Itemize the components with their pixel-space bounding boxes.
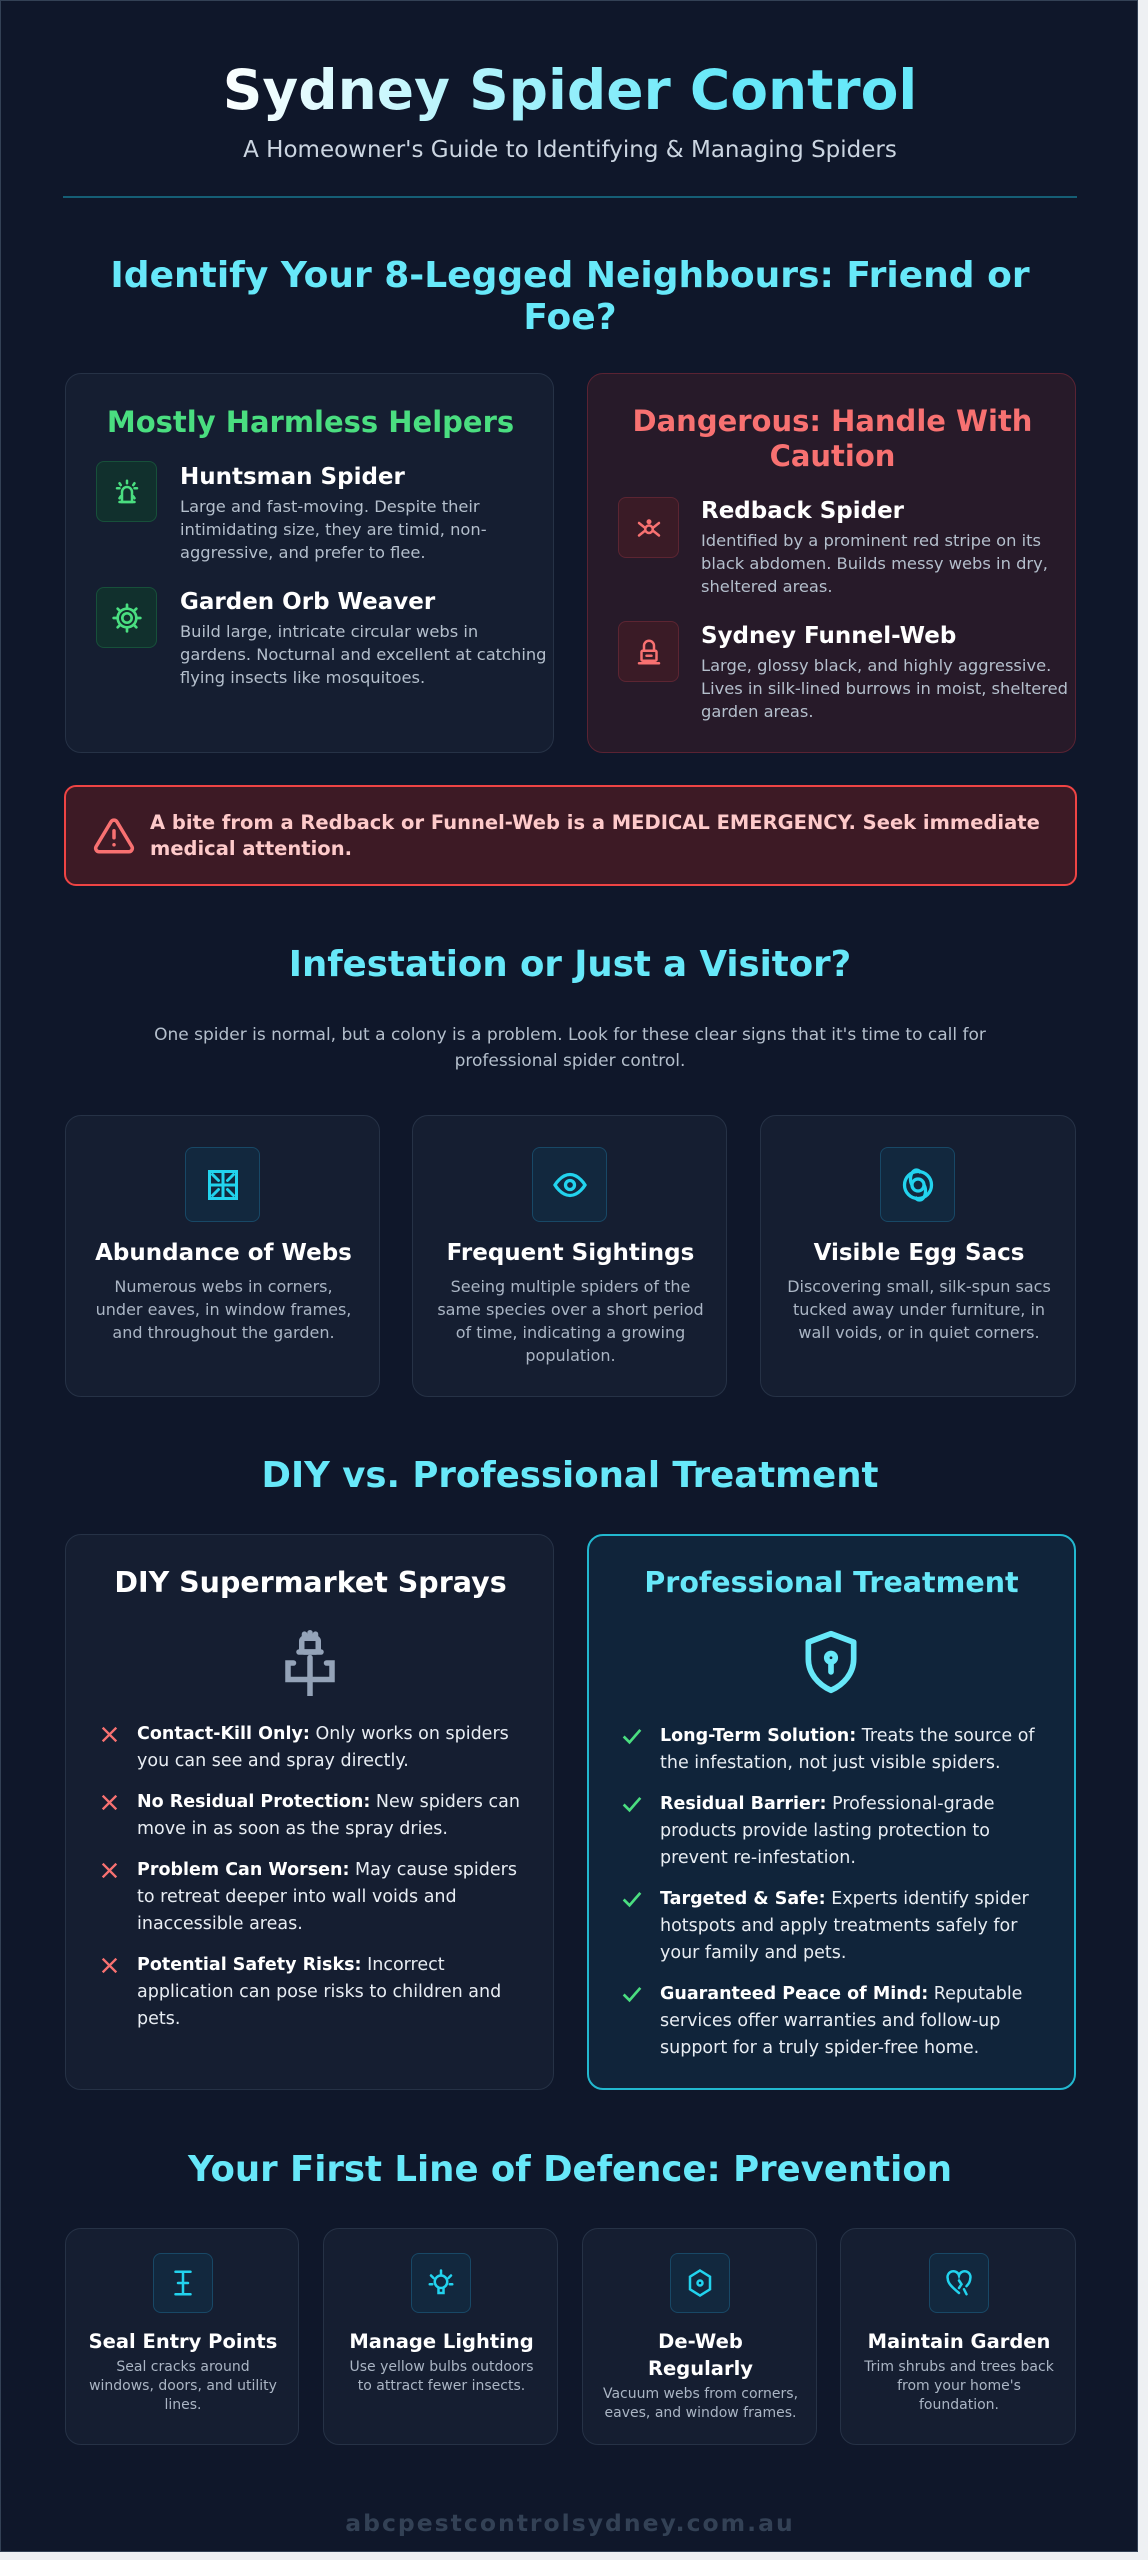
card: webs: Abundance of Webs [95,1240,352,1266]
icon: egg sac [880,1147,955,1222]
card: garden: Maintain Garden [868,2330,1050,2353]
heading: identify: Identify Your 8-Legged Neighbours: Friend or Foe? [110,255,1030,338]
card: webs: Numerous webs in corners, under eaves, in window frames, and throughout the garden. [96,1277,351,1342]
panel: dangerous [587,373,1076,753]
title [63,57,1077,123]
list: diy cons: Problem Can Worsen: May cause spiders to retreat deeper into wall voids and inaccessible areas. [137,1860,517,1934]
footer: abcpestcontrolsydney.com.au [345,2509,795,2537]
card: sightings: Seeing multiple spiders of the same species over a short period of time, indicating a growing population. [437,1277,704,1365]
card: egg sacs: Discovering small, silk-spun sacs tucked away under furniture, in wall voids, or in quiet corners. [787,1277,1051,1342]
callout text: A bite from a Redback or Funnel-Web is a MEDICAL EMERGENCY. Seek immediate medical attention. [150,811,1040,860]
item: huntsman: Large and fast-moving. Despite their intimidating size, they are timid, non-aggressive, and prefer to flee. [180,497,487,562]
panel: professional [587,1534,1076,2090]
list: pro benefits: Targeted & Safe: Experts identify spider hotspots and apply treatments safely for your family and pets. [660,1889,1029,1963]
icon: web grid [185,1147,260,1222]
card: egg sacs [760,1115,1076,1397]
card: garden: Trim shrubs and trees back from your home's foundation. [864,2359,1054,2413]
heading: diy vs pro: DIY vs. Professional Treatment [261,1455,878,1496]
item: orb weaver: Garden Orb Weaver [180,589,435,615]
item: redback [701,498,1048,596]
card: garden [840,2228,1076,2445]
heading: prevention: Your First Line of Defence: Prevention [188,2149,952,2190]
heading: infestation: Infestation or Just a Visitor? [289,944,851,985]
card: sightings: Frequent Sightings [447,1240,694,1266]
panel title: harmless: Mostly Harmless Helpers [107,405,514,439]
card: de-web: De-Web Regularly [648,2330,753,2380]
icon: hexagon [670,2253,730,2313]
icon: spray [285,1630,335,1696]
icon: heart leaf [929,2253,989,2313]
item: orb weaver: Build large, intricate circular webs in gardens. Nocturnal and excellent at catching flying insects like mosquitoes. [180,622,547,687]
card: sightings [412,1115,727,1397]
item: redback: Identified by a prominent red stripe on its black abdomen. Builds messy webs in dry, sheltered areas. [701,531,1048,596]
item: huntsman [180,464,487,562]
subtitle: A Homeowner's Guide to Identifying & Managing Spiders [243,137,897,163]
card: seal: Seal Entry Points [89,2330,277,2353]
icon: redback [618,497,679,558]
card: webs [65,1115,380,1397]
item: redback: Redback Spider [701,498,904,524]
card: de-web [582,2228,817,2445]
callout: medical emergency [64,785,1077,886]
card: seal [65,2228,299,2445]
card: lighting [323,2228,558,2445]
list: diy cons: Contact-Kill Only: Only works on spiders you can see and spray directly. [137,1724,509,1771]
panel title: dangerous: Dangerous: Handle With Caution [633,404,1032,473]
list: pro benefits: Long-Term Solution: Treats the source of the infestation, not just visible spiders. [660,1726,1035,1773]
icon: bulb [411,2253,471,2313]
icon: huntsman [96,461,157,522]
intro text: One spider is normal, but a colony is a problem. Look for these clear signs that it's time to call for professional spider control. [154,1025,986,1071]
list: pro benefits: Guaranteed Peace of Mind: Reputable services offer warranties and follow-up support for a truly spider-free home. [660,1984,1022,2058]
item: funnel-web: Sydney Funnel-Web [701,623,956,649]
list: diy cons: Potential Safety Risks: Incorrect application can pose risks to children and pets. [137,1955,501,2029]
card: de-web: Vacuum webs from corners, eaves, and window frames. [603,2386,798,2421]
item: funnel-web [701,623,1068,721]
list: pro benefits [622,1726,1035,2058]
list: diy cons: No Residual Protection: New spiders can move in as soon as the spray dries. [137,1792,520,1839]
panel: harmless [65,373,554,753]
list: diy cons [102,1724,520,2029]
card: lighting: Manage Lighting [349,2330,534,2353]
icon: funnel-web [618,621,679,682]
card: seal: Seal cracks around windows, doors, and utility lines. [89,2359,277,2413]
panel title: diy: DIY Supermarket Sprays [114,1566,507,1599]
card: lighting: Use yellow bulbs outdoors to attract fewer insects. [349,2359,534,2394]
list: pro benefits: Residual Barrier: Professional-grade products provide lasting protection to prevent re-infestation. [660,1794,995,1868]
item: huntsman: Huntsman Spider [180,464,405,490]
title: Sydney Spider Control [223,58,917,122]
icon: shield [806,1630,856,1694]
panel title: professional: Professional Treatment [644,1566,1019,1599]
card: egg sacs: Visible Egg Sacs [814,1240,1024,1266]
item: orb weaver [180,589,547,687]
icon: seal [153,2253,213,2313]
icon: eye [532,1147,607,1222]
panel: diy [65,1534,554,2090]
icon: orb weaver [96,587,157,648]
icon: warning [94,818,134,854]
item: funnel-web: Large, glossy black, and highly aggressive. Lives in silk-lined burrows in moist, sheltered garden areas. [701,656,1068,721]
